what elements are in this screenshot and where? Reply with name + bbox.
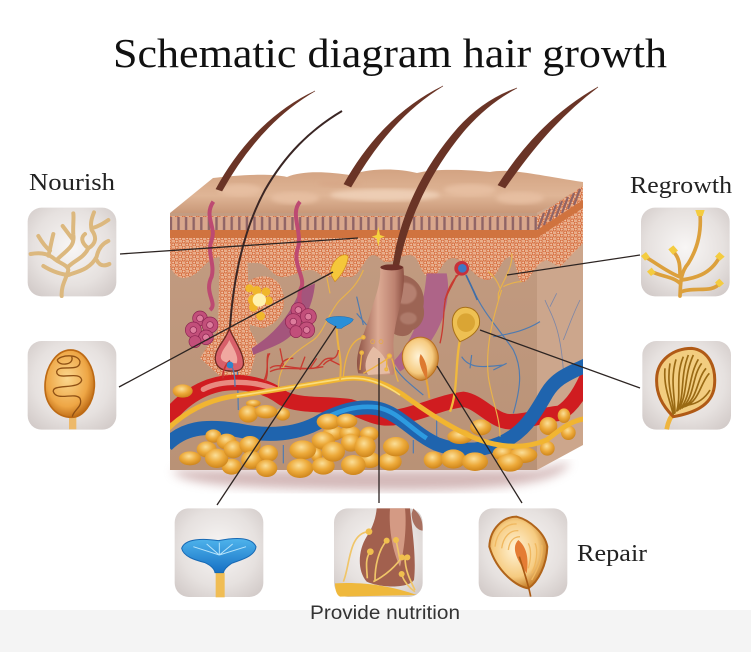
- title: Schematic diagram hair growth: [113, 30, 667, 76]
- right tiles: [641, 208, 731, 430]
- nerve star centre: [372, 227, 385, 247]
- line from blue tile: [217, 326, 336, 505]
- hair five: [498, 87, 598, 188]
- right side face: [537, 183, 583, 470]
- label: regrowth: Regrowth: [630, 173, 732, 199]
- right nerve tree and receptor: [331, 227, 522, 300]
- left hair bulb: [215, 328, 243, 387]
- yellow sebaceous cluster: [245, 284, 273, 320]
- epidermis cell layer: [170, 186, 583, 282]
- hair receptor: [445, 261, 477, 300]
- blue corpuscle: [326, 316, 353, 380]
- main yellow nerve: [167, 378, 588, 446]
- skin cross-section block: [170, 169, 583, 470]
- upper dermis structures: [185, 202, 338, 387]
- sweat coil right: [285, 303, 316, 338]
- line from nutrition tile: [378, 358, 380, 503]
- bottom tiles: [175, 508, 567, 597]
- front tick band: [170, 217, 537, 230]
- line from second left tile: [119, 272, 333, 387]
- faint veins on side face: [545, 293, 580, 370]
- follicle nerve endings: [343, 336, 398, 382]
- left muscle: [252, 283, 315, 355]
- orange basal band: [170, 200, 583, 238]
- line from repair tile: [437, 366, 522, 503]
- yellow lollipop corpuscle: [450, 307, 480, 412]
- capillaries near left bulb: [265, 348, 338, 382]
- leader lines: [119, 238, 640, 505]
- sweat coil left: [185, 311, 218, 348]
- blue vein: [167, 364, 588, 450]
- right muscle: [393, 273, 448, 372]
- hairs: [216, 86, 598, 327]
- tile: follicle nerve: [334, 508, 423, 597]
- side tick band: [538, 189, 580, 229]
- bottom grey band: [0, 610, 751, 652]
- sebaceous gland right: [393, 275, 424, 336]
- hair one: [216, 91, 315, 191]
- tile: ruffini sac: [642, 341, 731, 430]
- tile: blue corpuscle: [175, 508, 263, 597]
- deep dermis structures: [167, 264, 588, 478]
- left tiles: [28, 208, 116, 430]
- tile: onion corpuscle: [479, 508, 567, 597]
- front dermis face: [170, 213, 537, 470]
- central hair follicle: [357, 264, 404, 375]
- vein highlight: [320, 407, 427, 438]
- line from second right tile: [480, 330, 640, 388]
- tile: coiled gland: [28, 341, 116, 430]
- line to nourish tile: [120, 238, 358, 254]
- nerve ending cluster right: [488, 253, 522, 300]
- nerve highlight: [237, 378, 400, 396]
- onion corpuscle: [402, 337, 438, 398]
- fat cells: [173, 384, 576, 478]
- gland cell sheath: [248, 276, 284, 328]
- label: repair: Repair: [577, 541, 647, 567]
- thin yellow nerves: [278, 270, 502, 437]
- tile: branching nerve: [28, 208, 116, 296]
- red artery: [167, 375, 588, 422]
- hair three: [344, 86, 443, 187]
- line to regrowth tile: [507, 255, 640, 275]
- label: nourish: Nourish: [29, 170, 115, 196]
- artery highlight: [203, 382, 275, 389]
- red capillaries: [264, 274, 459, 380]
- label: provide nutrition: Provide nutrition: [310, 602, 460, 624]
- nerve ending glow: [331, 255, 348, 282]
- hair two, long: [230, 111, 342, 327]
- block shadow: [172, 462, 570, 490]
- tile: regrowth nerve: [641, 208, 730, 296]
- hair four, central: [393, 88, 517, 265]
- sweat duct left: [209, 202, 213, 310]
- top skin surface: [170, 169, 583, 213]
- sweat duct right: [296, 202, 302, 310]
- blue thin veins: [237, 290, 540, 463]
- follicle cell sheath: [200, 250, 258, 378]
